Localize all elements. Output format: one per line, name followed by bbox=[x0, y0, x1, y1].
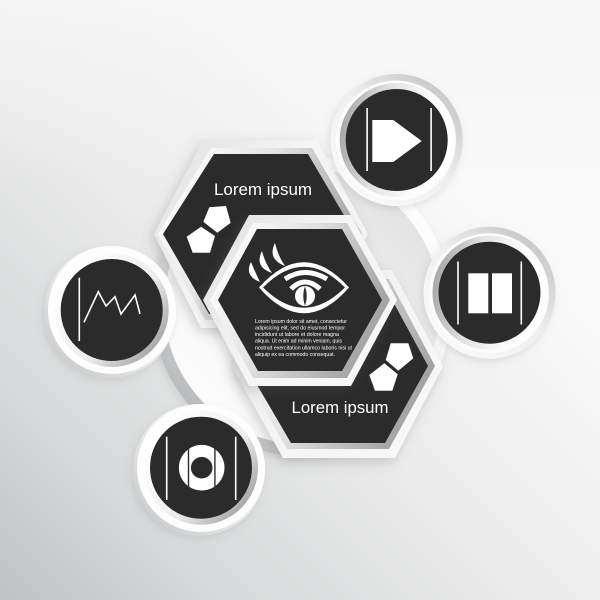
center body text: adipisicing elit, sed do eiusmod tempor bbox=[255, 326, 345, 332]
badge: line chart circle bbox=[44, 246, 176, 378]
icon: line chart bbox=[78, 278, 140, 341]
center body text: incididunt ut labore et dolore magna bbox=[255, 332, 339, 338]
top heading: Lorem ipsum bbox=[214, 181, 312, 199]
icon: eye bbox=[249, 243, 349, 313]
badge: play icon circle bbox=[331, 74, 463, 206]
icon: play bbox=[366, 108, 432, 171]
center body text: aliqua. Ut enim ad minim veniam, quis bbox=[255, 339, 342, 345]
center body text: aliquip ex ea commodo consequat. bbox=[255, 352, 335, 358]
top hexagon body bbox=[163, 154, 355, 314]
icon: bottom pentagons bbox=[369, 343, 413, 391]
panel: center hexagon bbox=[203, 215, 397, 386]
center body text: Lorem ipsum dolor sit amet, consectetur bbox=[255, 319, 347, 325]
center hexagon frame bbox=[203, 215, 397, 386]
center hexagon body bbox=[218, 229, 382, 371]
center body text: nostrud exercitation ullamco laboris nisi ut bbox=[255, 345, 353, 351]
icon: top pentagons bbox=[187, 206, 231, 253]
bottom hexagon frame bbox=[232, 270, 443, 458]
central ring behind the diagram bbox=[152, 156, 452, 456]
bottom hexagon body bbox=[246, 285, 428, 443]
icon: target bbox=[166, 437, 236, 500]
badge: pause icon circle bbox=[424, 227, 556, 359]
top hexagon frame bbox=[154, 140, 368, 328]
panel: bottom hexagon bbox=[232, 270, 443, 458]
bottom heading: Lorem ipsum bbox=[292, 399, 388, 417]
center body text bbox=[255, 319, 353, 358]
icon: pause bbox=[457, 262, 522, 324]
panel: top hexagon bbox=[154, 140, 368, 328]
badge: target circle bbox=[133, 404, 265, 536]
